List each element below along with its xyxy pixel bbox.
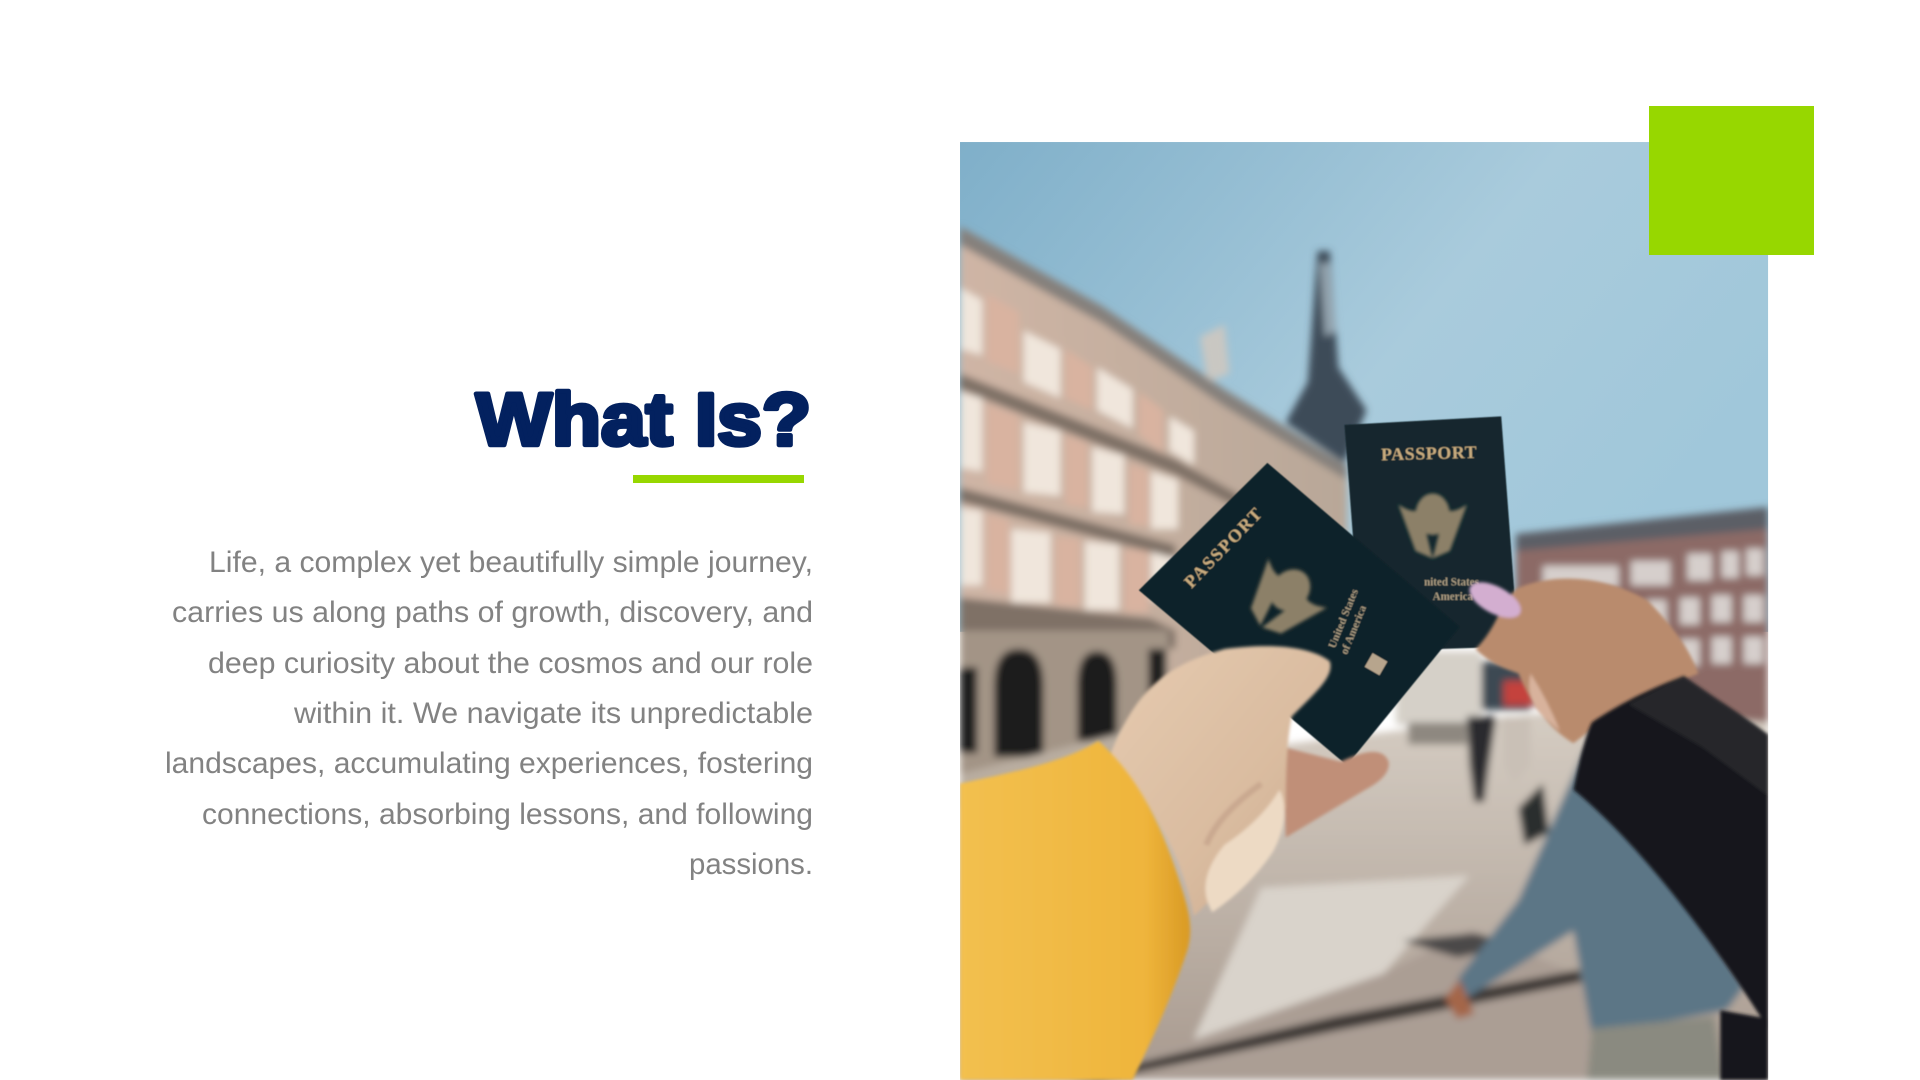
green accent square xyxy=(1649,106,1814,255)
body paragraph: connections, absorbing lessons, and following xyxy=(202,798,813,831)
background: blurred plaza xyxy=(960,227,1768,1080)
small label: nited States xyxy=(1424,576,1480,588)
arcade arches xyxy=(960,631,1168,778)
passport label: PASSPORT xyxy=(1381,442,1477,464)
cast shadow lines on ground xyxy=(1065,970,1582,1080)
small label xyxy=(1424,576,1480,603)
small label: United States xyxy=(1326,587,1361,650)
right red building xyxy=(1516,512,1768,722)
body paragraph: Life, a complex yet beautifully simple journey, xyxy=(209,546,813,579)
body paragraph xyxy=(165,546,813,881)
distant colonnade and crowd xyxy=(1396,651,1482,725)
eagle emblem xyxy=(1398,493,1467,558)
left hand xyxy=(1108,646,1389,916)
body paragraph: landscapes, accumulating experiences, fostering xyxy=(165,747,813,780)
body paragraph: deep curiosity about the cosmos and our role xyxy=(208,647,813,680)
pink wall columns xyxy=(987,294,1163,612)
body paragraph: within it. We navigate its unpredictable xyxy=(293,697,813,730)
photo: two hands holding passports in a plaza xyxy=(960,142,1768,1080)
left building xyxy=(960,242,1351,676)
body paragraph: passions. xyxy=(689,848,813,881)
chip symbol xyxy=(1365,653,1387,675)
painted nail xyxy=(1467,580,1523,620)
title: What Is? xyxy=(476,378,811,461)
passport label: PASSPORT xyxy=(1180,504,1266,592)
eagle emblem xyxy=(1248,556,1328,636)
ground xyxy=(960,686,1768,1080)
small label: America xyxy=(1433,591,1474,603)
title underline xyxy=(633,475,804,483)
spire xyxy=(1286,251,1367,463)
small label: of America xyxy=(1339,603,1369,656)
yellow sleeve xyxy=(960,741,1190,1080)
sky xyxy=(960,142,1768,632)
back passport xyxy=(1345,416,1518,651)
black sleeve xyxy=(1573,676,1768,1080)
right hand xyxy=(1464,575,1698,743)
body paragraph: carries us along paths of growth, discovery, and xyxy=(172,596,813,629)
person walking xyxy=(1457,747,1745,1035)
front tilted passport xyxy=(1139,463,1460,765)
